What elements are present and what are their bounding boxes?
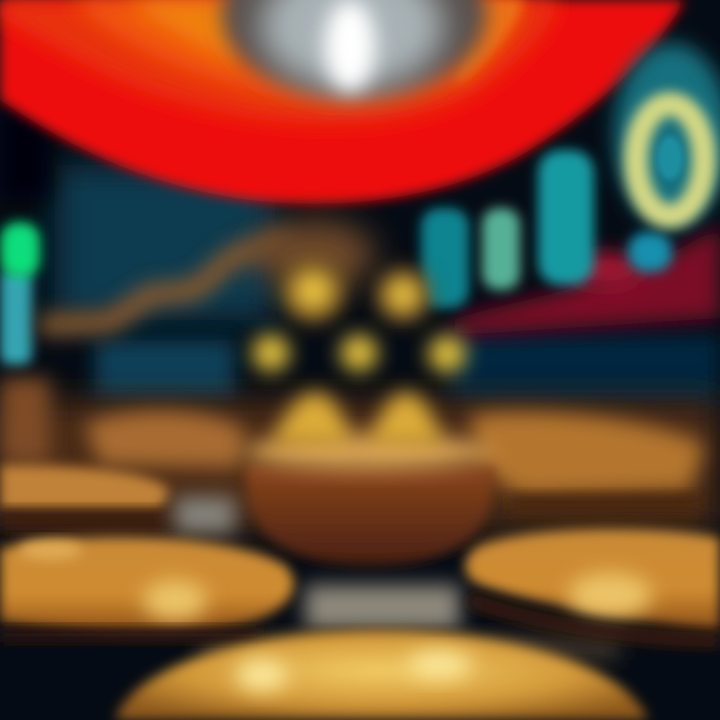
mid-row golden slabs (0, 378, 705, 530)
red swirl arc (0, 0, 685, 204)
teal candlestick bars (421, 150, 672, 308)
bottom golden disc (115, 630, 648, 720)
left green bar (0, 222, 40, 365)
target ring icon (614, 43, 720, 227)
central bowl (243, 392, 495, 565)
bottom-left golden slab (0, 537, 294, 642)
bottom-right golden slab (465, 529, 720, 640)
brown wavy chart line (40, 220, 375, 325)
central light vortex (222, 0, 486, 98)
dark red band on right (455, 225, 720, 335)
yellow coins (252, 259, 466, 373)
grey floor (175, 497, 620, 660)
